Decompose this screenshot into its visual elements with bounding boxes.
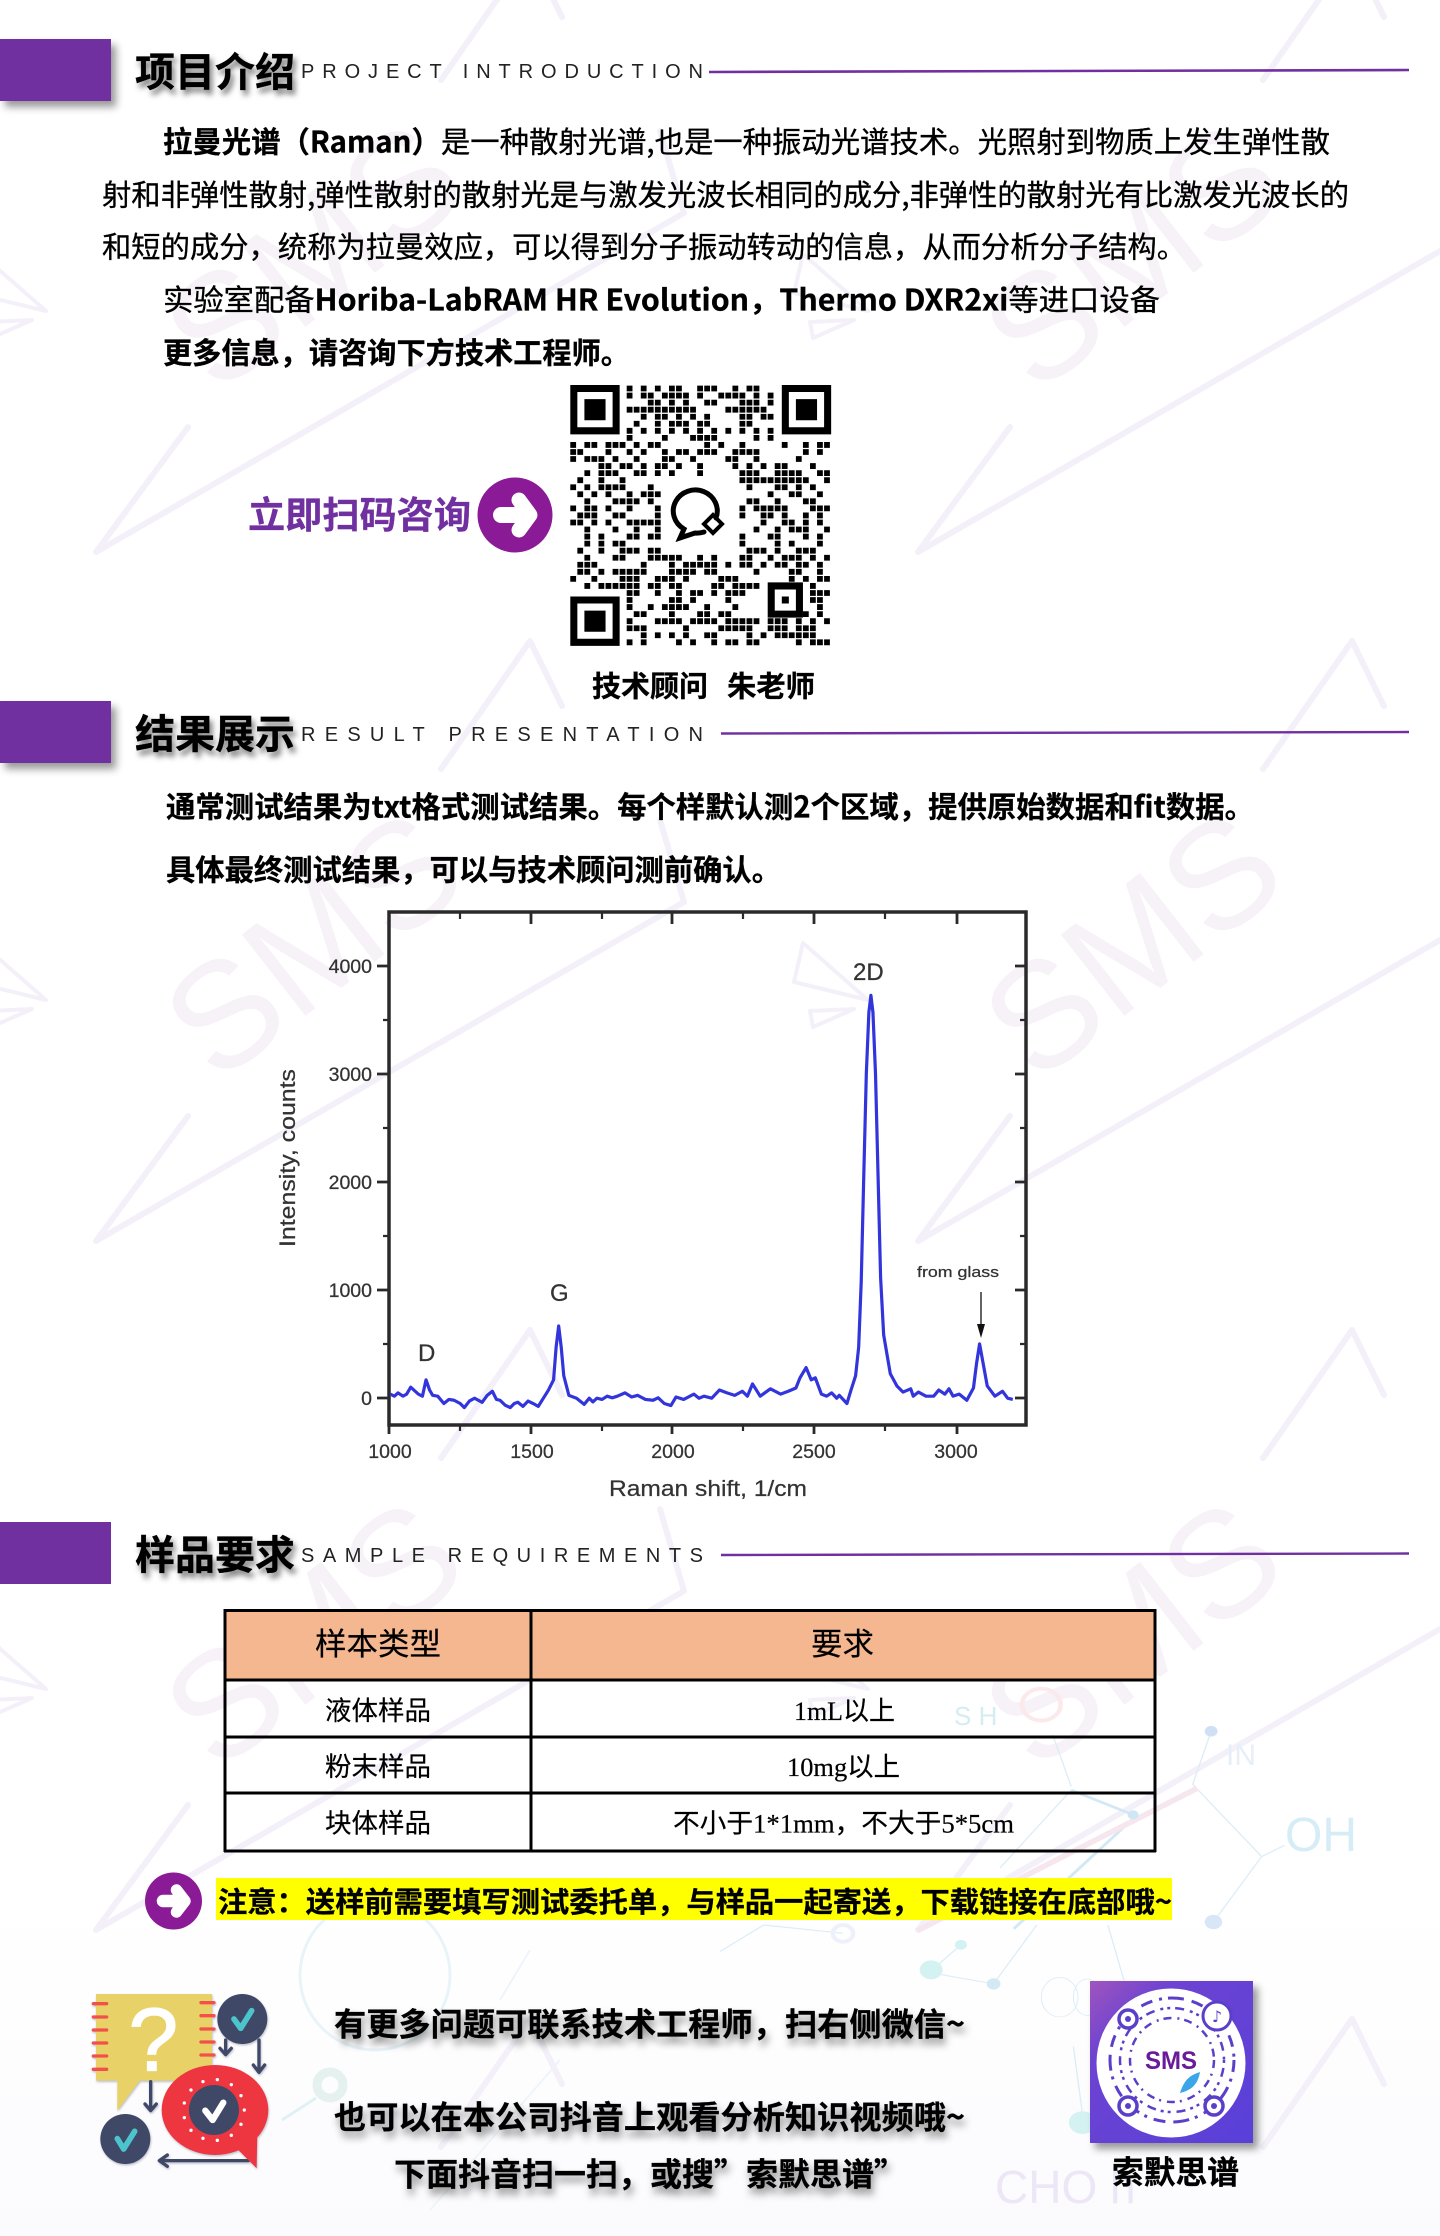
heading: 项目介绍 [135, 40, 295, 98]
arrow: from glass [977, 1292, 985, 1338]
QR caption: 技术顾问 [592, 664, 708, 706]
header: requirement: 要求 [811, 1627, 874, 1662]
peak label G: G [550, 1280, 569, 1307]
y axis title: Intensity, counts [275, 1069, 300, 1247]
card caption: 索默思谱 [1112, 2148, 1239, 2194]
row: liquid [325, 1696, 895, 1726]
background watermark: SMS [133, 1467, 493, 1799]
sample requirements table [224, 1609, 1156, 1852]
rule [721, 1554, 1409, 1555]
intro paragraph: 和短的成分，统称为拉曼效应，可以得到分子振动转动的信息，从而分析分子结构。 [102, 224, 1186, 266]
corner markers [1119, 2010, 1223, 2115]
y axis labels: 3000 [329, 1064, 372, 1086]
section header: result presentation [0, 701, 1409, 763]
contact text: 也可以在本公司抖音上观看分析知识视频哦~ [334, 2092, 965, 2138]
contact text [334, 2000, 965, 2196]
row: bulk: 块体样品 [325, 1808, 431, 1838]
card background [1090, 1981, 1253, 2143]
annotation: from glass: from glass [917, 1264, 999, 1281]
x axis labels: 3000 [934, 1441, 978, 1463]
icon: music badge [1203, 2002, 1231, 2030]
Raman spectrum chart [275, 912, 1026, 1501]
intro paragraph: 实验室配备Horiba-LabRAM HR Evolution，Thermo DXR2xi 等进口设备 [163, 278, 1160, 320]
icon: question and check bubbles [93, 1990, 268, 2168]
background chemistry molecules: CHO h [995, 2161, 1136, 2213]
plot frame and ticks [377, 912, 1026, 1434]
Douyin code card [1090, 1981, 1253, 2143]
intro paragraph: 拉曼光谱（Raman）是一种散射光谱,也是一种振动光谱技术。光照射到物质上发生弹性散 [163, 120, 1330, 162]
background watermark: SMS [133, 778, 493, 1110]
background chemistry molecules [282, 1689, 1357, 2213]
peak label 2D: 2D [853, 959, 884, 986]
row: bulk: 不小于1*1mm，不大于5*5cm [673, 1808, 1014, 1838]
row: bulk [325, 1808, 1014, 1838]
icon: question and check bubbles: ? [128, 1990, 178, 2090]
table header fill [225, 1610, 1155, 1680]
x axis title: Raman shift, 1/cm [609, 1476, 807, 1501]
purple block [0, 1522, 111, 1584]
section header: project introduction [0, 39, 1409, 101]
intro paragraph: 射和非弹性散射,弹性散射的散射光是与激发光波长相同的成分,非弹性的散射光有比激发光波长的 [102, 172, 1349, 214]
icon: arrow circle [478, 478, 552, 552]
result description: 具体最终测试结果，可以与技术顾问测前确认。 [166, 848, 781, 890]
result description: 通常测试结果为txt格式测试结果。每个样默认测2个区域，提供原始数据和fit数据。 [166, 784, 1254, 826]
contact text: 下面抖音扫一扫，或搜”索默思谱” [394, 2150, 906, 2196]
contact text: 有更多问题可联系技术工程师，扫右侧微信~ [334, 2000, 965, 2046]
background bottom tint [0, 1900, 1440, 2236]
icon: music badge: ♪ [1212, 2007, 1222, 2026]
english label: RESULT PRESENTATION [301, 724, 703, 746]
background watermark: SMS [952, 778, 1312, 1110]
row: liquid: 液体样品 [325, 1696, 431, 1726]
english label: SAMPLE REQUIREMENTS [301, 1545, 703, 1567]
corner marker dots [1125, 2016, 1217, 2109]
header: sample type: 样本类型 [315, 1627, 441, 1662]
intro paragraph [102, 120, 1349, 372]
table grid [224, 1609, 1156, 1852]
QR code: technical consultant [570, 389, 831, 642]
y axis labels: 4000 [329, 956, 372, 978]
peak label D: D [418, 1340, 435, 1367]
english label: PROJECT INTRODUCTION [301, 61, 703, 83]
x axis labels [368, 1441, 978, 1463]
intro paragraph: 更多信息，请咨询下方技术工程师。 [163, 330, 630, 372]
QR caption: 朱老师 [727, 664, 815, 706]
heading: 结果展示 [135, 702, 295, 760]
y axis labels: 0 [361, 1388, 372, 1410]
purple block [0, 39, 111, 101]
x axis labels: 1000 [368, 1441, 412, 1463]
icon: note arrow [145, 1872, 202, 1930]
row: powder: 粉末样品 [325, 1752, 431, 1782]
row: liquid: 1mL以上 [794, 1696, 895, 1726]
rule [721, 732, 1409, 734]
background chemistry molecules: S H [954, 1701, 997, 1731]
y axis labels: 2000 [329, 1172, 372, 1194]
background chemistry molecules: IN [1226, 1739, 1256, 1772]
background chemistry molecules: OH [1285, 1809, 1357, 1862]
background watermark: SMS [133, 89, 493, 421]
scan to consult prompt: 立即扫码咨询 [248, 485, 471, 539]
heading: 样品要求 [135, 1523, 295, 1581]
x axis labels: 2000 [651, 1441, 695, 1463]
rule [709, 70, 1409, 72]
result description [166, 784, 1254, 890]
spectrum line [390, 995, 1013, 1408]
y axis labels [329, 956, 372, 1410]
x axis labels: 1500 [510, 1441, 554, 1463]
icon: blue sail [1180, 2072, 1200, 2093]
x axis labels: 2500 [792, 1441, 836, 1463]
note highlight: 注意：送样前需要填写测试委托单，与样品一起寄送，下载链接在底部哦~ [218, 1880, 1172, 1921]
row: powder: 10mg以上 [787, 1752, 900, 1782]
row: powder [325, 1752, 900, 1782]
white disc [1096, 1988, 1246, 2138]
SMS logo: SMS [1145, 2047, 1197, 2075]
background watermark: SMS [952, 89, 1312, 421]
purple block [0, 701, 111, 763]
icon: QR centre chat logo [673, 490, 722, 538]
code rings [1110, 1998, 1234, 2122]
background watermark: SMS [952, 1467, 1312, 1799]
section header: sample requirements [0, 1522, 1409, 1584]
y axis labels: 1000 [329, 1280, 372, 1302]
QR caption [592, 664, 815, 706]
